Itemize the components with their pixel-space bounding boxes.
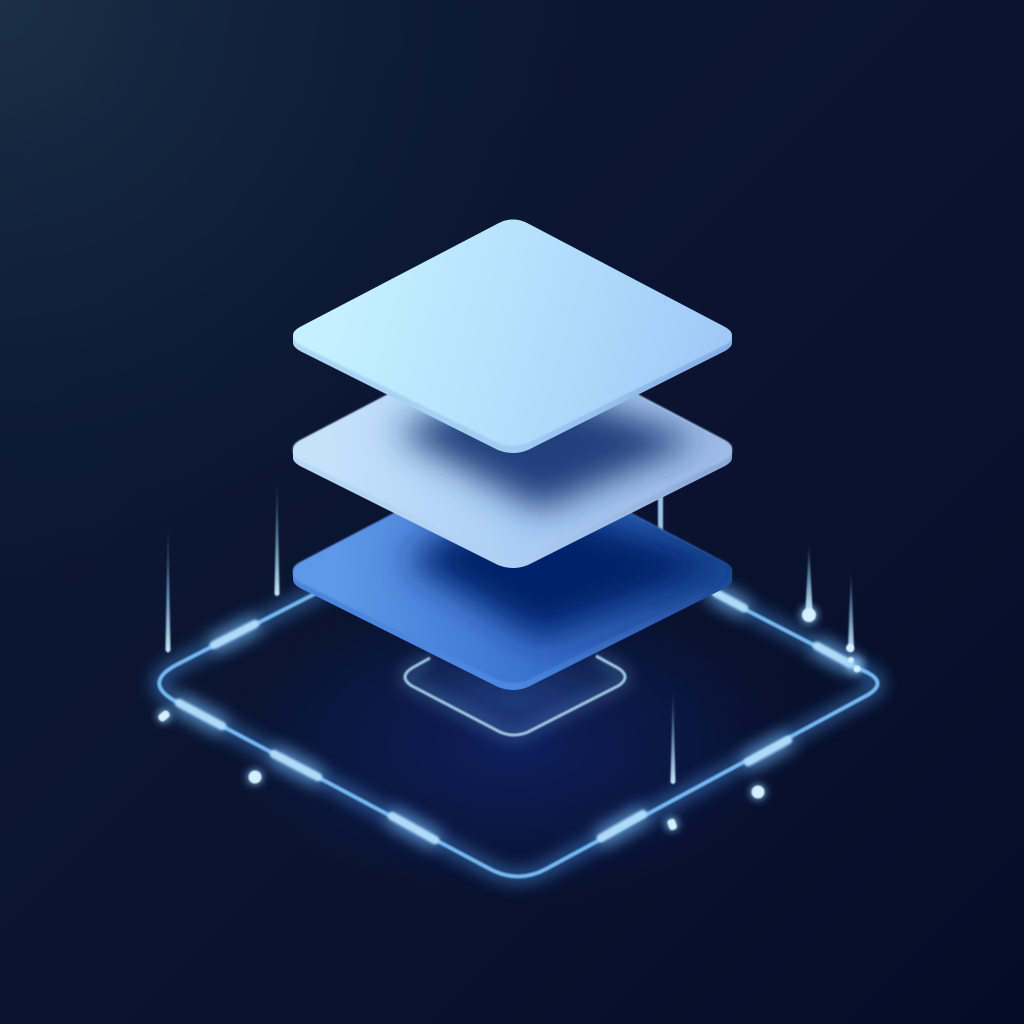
platform: glowing outline with light segments: [159, 586, 878, 876]
floor glow: [215, 580, 815, 910]
light needles: [166, 476, 854, 784]
light segments: [177, 592, 852, 841]
inner outlined tile: [405, 650, 625, 735]
layer 3: lower blue plate: [292, 512, 733, 690]
glowing particles: [157, 606, 864, 831]
layer 1: top light plate: [293, 218, 732, 453]
layer 2: middle pale plate: [292, 394, 733, 568]
illustration: floating isometric layer stack over a glowing platform: [0, 0, 894, 898]
